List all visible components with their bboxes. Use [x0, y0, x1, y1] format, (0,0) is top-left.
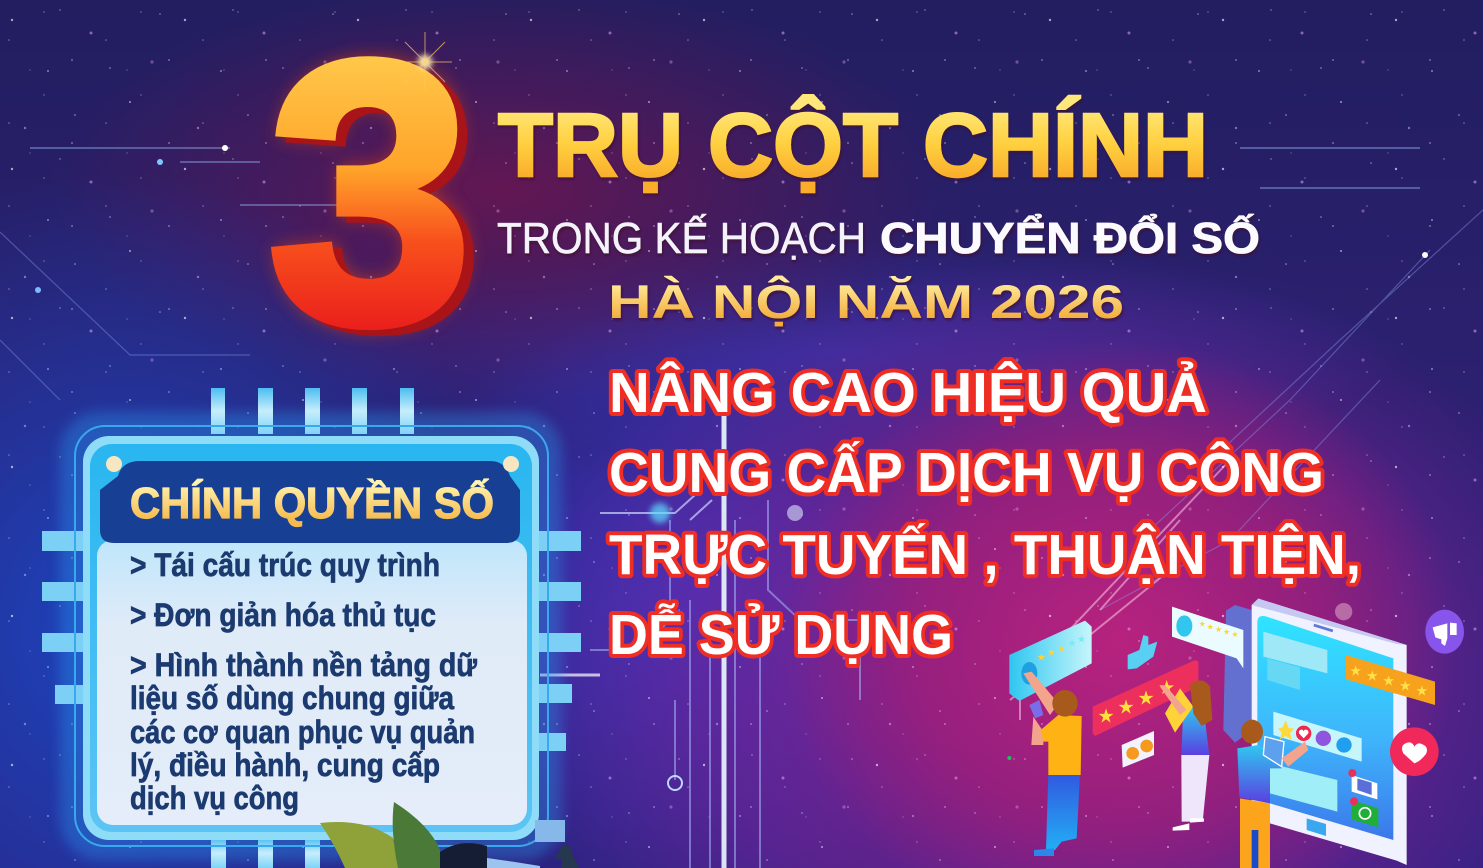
chip pins	[42, 388, 581, 868]
chip rivets	[106, 456, 519, 472]
red stars card	[1093, 660, 1198, 736]
emoji card	[1122, 731, 1154, 768]
red and white headline: CUNG CẤP DỊCH VỤ CÔNG	[609, 440, 1324, 505]
rating card top center: ★	[1207, 622, 1214, 631]
subtitle line 2: HÀ NỘI NĂM 2026	[608, 275, 1124, 328]
chip heading: CHÍNH QUYỀN SỐ	[130, 477, 494, 528]
rating card top center: ★	[1223, 628, 1230, 637]
chip list text: liệu số dùng chung giữa	[130, 680, 454, 716]
tablet	[1252, 599, 1407, 865]
person center	[1160, 680, 1212, 831]
heart badge	[1390, 727, 1439, 776]
panel: chip Chính quyền số	[42, 388, 581, 868]
red and white headline: NÂNG CAO HIỆU QUẢ	[609, 360, 1207, 425]
rating card top center: ★	[1199, 620, 1206, 629]
title: TRỤ CỘT CHÍNH: TRỤ CỘT CHÍNH	[498, 94, 1208, 196]
orange rating card: ★	[1382, 672, 1395, 688]
red stars card: ★	[1158, 678, 1175, 699]
red and white headline	[609, 360, 1361, 667]
back panel	[1223, 605, 1252, 743]
chip list text: dịch vụ công	[130, 780, 299, 816]
rating card left: ★	[1047, 648, 1056, 659]
rating card left: ★	[1057, 643, 1066, 654]
illustration: people using digital services on a tablet	[1007, 599, 1464, 868]
rating card left: ★	[1068, 639, 1077, 650]
rating card left: ★	[1037, 653, 1046, 664]
red stars card: ★	[1137, 689, 1155, 710]
chip white body	[97, 540, 527, 825]
orange rating card: ★	[1366, 668, 1379, 684]
orange rating card: ★	[1399, 678, 1412, 694]
subtitle line 1: CHUYỂN ĐỔI SỐ	[880, 212, 1260, 263]
red and white headline: DỄ SỬ DỤNG	[609, 602, 953, 667]
person left	[1023, 672, 1082, 856]
orange rating card	[1346, 655, 1435, 705]
thumbs down badge	[1425, 610, 1464, 654]
person right	[1237, 720, 1308, 868]
title: big number 3: 3	[278, 0, 482, 406]
rating card left: ★	[1077, 635, 1086, 646]
chip list text: lý, điều hành, cung cấp	[130, 747, 440, 783]
subtitle line 1: TRONG KẾ HOẠCH	[497, 213, 866, 263]
rating card top center: ★	[1215, 625, 1222, 634]
thumbs up icon	[1128, 635, 1157, 669]
rating card top center: ★	[1231, 630, 1239, 639]
subtitle line 1	[497, 212, 1260, 263]
red stars card: ★	[1117, 698, 1135, 719]
rating card left	[1009, 621, 1092, 701]
red and white headline: TRỰC TUYẾN , THUẬN TIỆN,	[609, 522, 1361, 587]
red stars card: ★	[1097, 707, 1115, 728]
orange rating card: ★	[1416, 683, 1428, 699]
chip list text: các cơ quan phục vụ quản	[130, 714, 475, 750]
rating card top center	[1172, 607, 1243, 668]
overlay: leaves and figures at the bottom of the chip	[320, 802, 579, 868]
chip list text: > Tái cấu trúc quy trình	[130, 547, 440, 583]
chip list text: > Hình thành nền tảng dữ	[130, 647, 478, 683]
chip list text: > Đơn giản hóa thủ tục	[130, 597, 436, 633]
chip list text	[130, 547, 478, 816]
orange rating card: ★	[1349, 662, 1362, 678]
chip header	[100, 461, 520, 543]
reactions	[1278, 720, 1294, 740]
